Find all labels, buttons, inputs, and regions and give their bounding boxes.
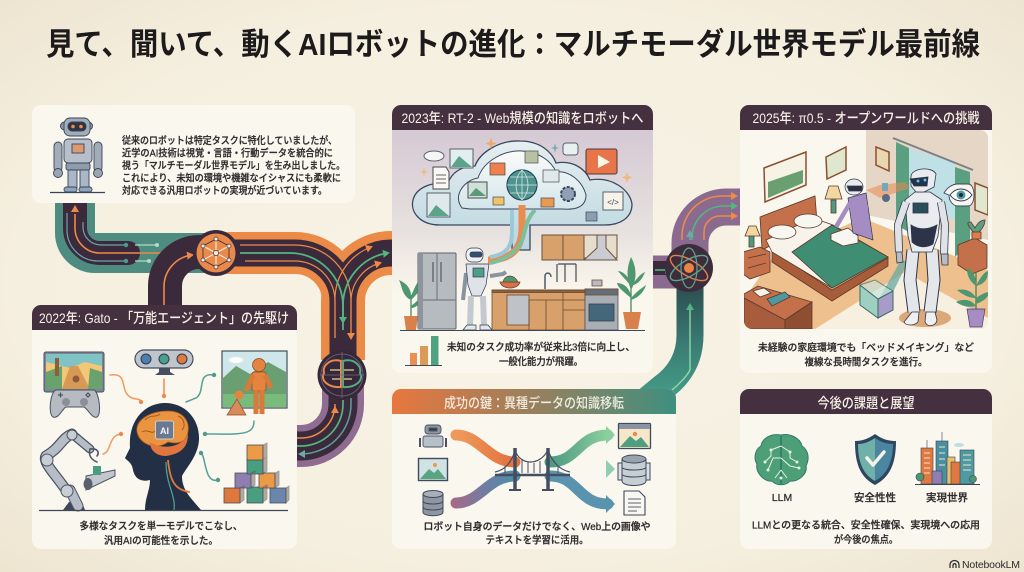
icon: knowledge cloud	[412, 138, 632, 250]
header: pi0.5: 2025年: π0.5 - オープンワールドへの挑戦	[752, 110, 980, 126]
icon: output document	[624, 491, 645, 515]
text: key caption	[424, 520, 650, 546]
header: RT-2	[392, 105, 653, 130]
text: future caption	[752, 518, 980, 546]
text: introduction: 近学のAI技術は視覚・言語・行動データを統合的に	[122, 146, 333, 160]
data streams	[488, 205, 535, 263]
icon: source database	[423, 490, 443, 516]
floor plant	[956, 268, 990, 327]
panel: key to success	[392, 389, 676, 549]
icon: city skyline	[915, 432, 980, 484]
upper cabinets and hood	[542, 235, 617, 282]
track: to pi panel	[645, 196, 746, 272]
icon: output database	[618, 455, 650, 486]
panel: introduction	[32, 105, 355, 203]
pathway: connecting tracks	[67, 196, 746, 454]
text: RT-2 caption: 一般化能力が飛躍。	[499, 355, 583, 368]
plant right	[617, 257, 646, 329]
ground line	[39, 510, 288, 512]
text: pi0.5 caption	[758, 341, 974, 368]
counter, sink, stove	[492, 273, 618, 330]
icon: source image	[418, 458, 448, 480]
track: plum rising from Gato	[164, 252, 218, 309]
track: teal rising from key panel	[645, 282, 690, 402]
footer: NotebookLM badge: NotebookLM	[962, 559, 1020, 571]
text: RT-2 caption: 未知のタスク成功率が従来比3倍に向上し、	[447, 340, 635, 354]
text: key caption: ロボット自身のデータだけでなく、Web上の画像や	[424, 520, 650, 533]
text: RT-2 caption	[447, 340, 635, 368]
text: Gato caption: 多様なタスクを単一モデルでこなし、	[80, 520, 242, 532]
arrows: output heads	[606, 426, 615, 513]
vision beam and cube	[860, 182, 910, 318]
wall paintings	[764, 147, 988, 215]
text: introduction: 対応できる汎用ロボットの実現が近づいています。	[122, 184, 327, 197]
icon: robot arm	[41, 430, 115, 510]
text: key caption: テキストを学習に活用。	[486, 534, 588, 546]
icon: robot	[50, 118, 105, 192]
icon: toy blocks	[224, 443, 289, 503]
eye speech bubble	[944, 184, 974, 206]
icon: knowledge cloud: </>	[607, 198, 619, 207]
desk with books	[744, 286, 812, 329]
label: LLM: LLM	[772, 492, 792, 504]
chart: rising bars	[405, 336, 442, 366]
icon: picture with orange robot	[222, 351, 287, 415]
arrows: modalities to brain	[103, 375, 254, 480]
small purple robot	[836, 179, 873, 240]
text: future caption: LLMとの更なる統合、安全性確保、実現境への応用	[752, 518, 980, 532]
icon: bridge	[495, 448, 570, 490]
illustration: bedroom	[743, 130, 990, 329]
text: Gato caption	[80, 520, 242, 547]
header: future: 今後の課題と展望	[818, 395, 914, 411]
header: Gato	[32, 305, 297, 330]
header: gradient	[392, 389, 676, 414]
text: Gato caption: 汎用AIの可能性を示した。	[104, 534, 218, 547]
panel: future challenges	[740, 389, 992, 549]
illustration background	[392, 130, 653, 290]
icon: output window	[618, 424, 650, 448]
text: future caption: が今後の焦点。	[834, 533, 898, 546]
track: orange junction	[215, 245, 396, 360]
humanoid robot	[463, 248, 506, 330]
node: network hub	[193, 230, 239, 276]
fridge	[418, 253, 456, 329]
panel: 2025 pi0.5	[740, 105, 992, 373]
icon: shield with check	[855, 434, 896, 485]
text: introduction: 視う「マルチモーダル世界モデル」を生み出しました。	[122, 159, 345, 172]
panel: 2023 RT-2	[392, 105, 653, 373]
label: safety: 安全性性	[854, 491, 896, 504]
main humanoid robot	[896, 169, 951, 327]
icon: head with brain	[125, 403, 201, 510]
text: introduction: これにより、未知の環境や機雑なイシャスにも柔軟に	[122, 172, 341, 184]
icon: head with brain: AI	[160, 426, 169, 436]
diagram: data flow bands	[456, 435, 608, 504]
header: future	[740, 389, 992, 414]
icon: sensor camera	[135, 350, 193, 375]
bed	[760, 196, 888, 301]
illustration: kitchen	[399, 235, 646, 330]
header: pi0.5	[740, 105, 992, 130]
icon: circuit brain	[755, 435, 808, 485]
header: RT-2: 2023年: RT-2 - Web規模の知識をロボットへ	[402, 110, 644, 126]
text: introduction: 従来のロボットは特定タスクに特化していましたが、	[122, 134, 337, 147]
window and curtains	[893, 138, 973, 257]
icon: source robot	[420, 425, 446, 447]
nightstands and lamps	[743, 186, 987, 279]
node: atom	[665, 244, 713, 292]
text: pi0.5 caption: 複線な長時間タスクを進行。	[804, 356, 928, 368]
label: real world: 実現世界	[926, 491, 968, 504]
track: purple return	[290, 370, 351, 454]
header: Gato: 2022年: Gato - 「万能エージェント」の先駆け	[39, 310, 289, 326]
panel: 2022 Gato	[32, 305, 297, 549]
track: teal start	[67, 200, 215, 263]
text: introduction	[122, 134, 345, 197]
icon: game monitor and controller	[44, 352, 104, 417]
header: gradient: 成功の鍵：異種データの知識移転	[444, 395, 624, 411]
node: brain circuit	[318, 350, 366, 400]
text: pi0.5 caption: 未経験の家庭環境でも「ベッドメイキング」など	[758, 341, 974, 354]
plant left	[399, 278, 423, 330]
